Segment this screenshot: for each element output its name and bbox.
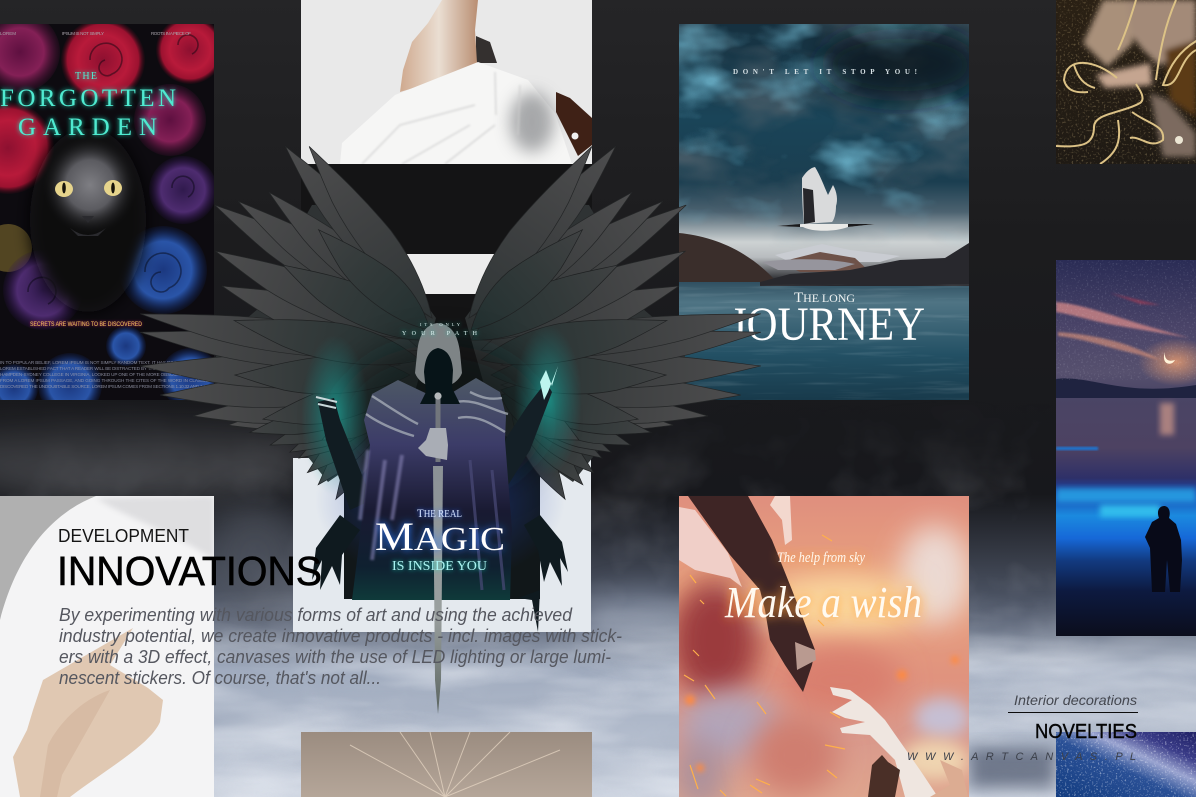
caption: Interior decorations — [1014, 692, 1137, 708]
storm clouds — [679, 24, 980, 249]
hair — [476, 36, 497, 63]
hills — [1056, 378, 1196, 398]
poster header — [0, 32, 191, 35]
claws — [312, 515, 568, 632]
poster header: ROOTS IN A PIECE OF — [151, 31, 191, 36]
lake ripples — [679, 284, 969, 400]
poster body text: LOREM ESTABLISHED FACT THAT A READER WILL BE DISTRACTED BY THE READABLE CONTENT OF A — [0, 366, 215, 371]
hands on sword — [418, 428, 448, 460]
face void — [420, 348, 460, 404]
poster: black panel behind wings — [301, 164, 592, 464]
poster title: GARDEN — [18, 114, 157, 141]
poster title — [0, 71, 176, 141]
wing: left — [138, 134, 446, 506]
robe glow — [315, 415, 565, 585]
cat — [30, 128, 146, 312]
poster body text: DISCOVERED THE UNDOUBTABLE SOURCE. LOREM IPSUM COMES FROM SECTIONS 1.10.32 AND 1.10.33 — [0, 384, 214, 389]
arms — [316, 366, 558, 510]
poster: forgotten garden — [0, 24, 214, 400]
illustration: winged reaper — [138, 134, 763, 714]
poster subtitle: THE REAL — [417, 506, 462, 520]
wing inner shadow — [335, 345, 545, 495]
hood — [415, 323, 462, 387]
moon glow — [1140, 340, 1196, 384]
icon: crane — [777, 167, 875, 231]
mountains — [679, 233, 969, 286]
hands — [679, 496, 968, 797]
couple silhouette — [1145, 506, 1182, 592]
wing: right — [455, 134, 763, 506]
shoulder — [400, 0, 478, 92]
tiny poster lines — [402, 322, 478, 337]
poster title: JOURNEY — [730, 298, 925, 351]
tiny poster lines: YOUR PATH — [402, 331, 478, 337]
poster body text — [0, 360, 215, 389]
body copy: ers with a 3D effect, canvases with the use of LED lighting or large lumi- — [59, 647, 611, 667]
poster: night lake — [1056, 260, 1196, 636]
figure — [13, 628, 163, 797]
spark glows — [685, 656, 959, 772]
body copy — [59, 605, 622, 688]
poster: magic white card — [293, 458, 591, 632]
background smoke — [0, 400, 1196, 797]
wing shading — [96, 496, 214, 560]
stars — [1056, 260, 1196, 380]
poster title: THE — [75, 71, 97, 82]
poster title: MAGIC — [375, 514, 505, 559]
poster: gold figure — [1056, 0, 1196, 164]
poster: top centre fur — [301, 0, 592, 164]
gold ribbons — [1056, 0, 1196, 164]
text block: novelties — [1008, 692, 1138, 743]
poster: bottom left figure — [0, 496, 214, 797]
body copy: By experimenting with various forms of art and using the achieved — [59, 605, 573, 625]
textured corner — [0, 496, 96, 620]
fur coat — [340, 62, 572, 164]
poster body text: HAMPDEN-SYDNEY COLLEGE IN VIRGINIA, LOOKED UP ONE OF THE MORE OBSCURE LATIN WORDS — [0, 372, 214, 377]
water glow — [1056, 447, 1196, 517]
website url: W W W . A R T C A N V A S . P L — [907, 751, 1136, 763]
body copy: nescent stickers. Of course, that's not all... — [59, 668, 381, 688]
poster: make a wish — [671, 496, 971, 797]
poster title: FORGOTTEN — [0, 85, 176, 112]
icon: moon — [1164, 352, 1175, 364]
poster title: Make a wish — [724, 578, 922, 627]
text block: development — [57, 526, 622, 688]
poster tagline: DON'T LET IT STOP YOU! — [733, 68, 917, 76]
moon reflection — [1160, 403, 1174, 435]
poster: galaxy — [1056, 732, 1196, 797]
arm glow — [301, 335, 369, 495]
eyebrow: DEVELOPMENT — [58, 526, 189, 546]
cloak folds — [360, 392, 508, 590]
poster body text: IN TO POPULAR BELIEF, LOREM IPSUM IS NOT SIMPLY RANDOM TEXT. IT HAS ROOTS IN A PIECE OF — [0, 360, 214, 365]
poster subtitle: THE LONG — [794, 290, 855, 306]
poster subtitle: The help from sky — [777, 550, 865, 566]
rule — [1008, 712, 1138, 713]
poster: the long journey — [679, 24, 980, 400]
poster header: IPSUM IS NOT SIMPLY — [62, 31, 104, 36]
sparks — [684, 535, 845, 796]
heading: NOVELTIES — [1035, 721, 1137, 743]
poster: bottom centre rays — [301, 732, 592, 797]
heading: INNOVATIONS — [57, 548, 322, 594]
sword — [433, 392, 443, 714]
poster tagline: SECRETS ARE WAITING TO BE DISCOVERED — [30, 321, 142, 328]
poster header: LOREM — [0, 31, 16, 36]
clouds — [671, 525, 971, 797]
figure — [1083, 0, 1196, 157]
body copy: industry potential, we create innovative products - incl. images with stick- — [59, 626, 622, 646]
poster tagline: IS INSIDE YOU — [392, 559, 487, 574]
tiny poster lines: ITS ONLY — [420, 322, 461, 327]
sky streaks — [1056, 293, 1190, 360]
hand with ring — [556, 92, 592, 156]
poster body text: FROM A LOREM IPSUM PASSAGE, AND GOING THROUGH THE CITES OF THE WORD IN CLASSICAL — [0, 378, 214, 383]
cloak — [352, 378, 512, 600]
arm glow — [514, 325, 582, 475]
